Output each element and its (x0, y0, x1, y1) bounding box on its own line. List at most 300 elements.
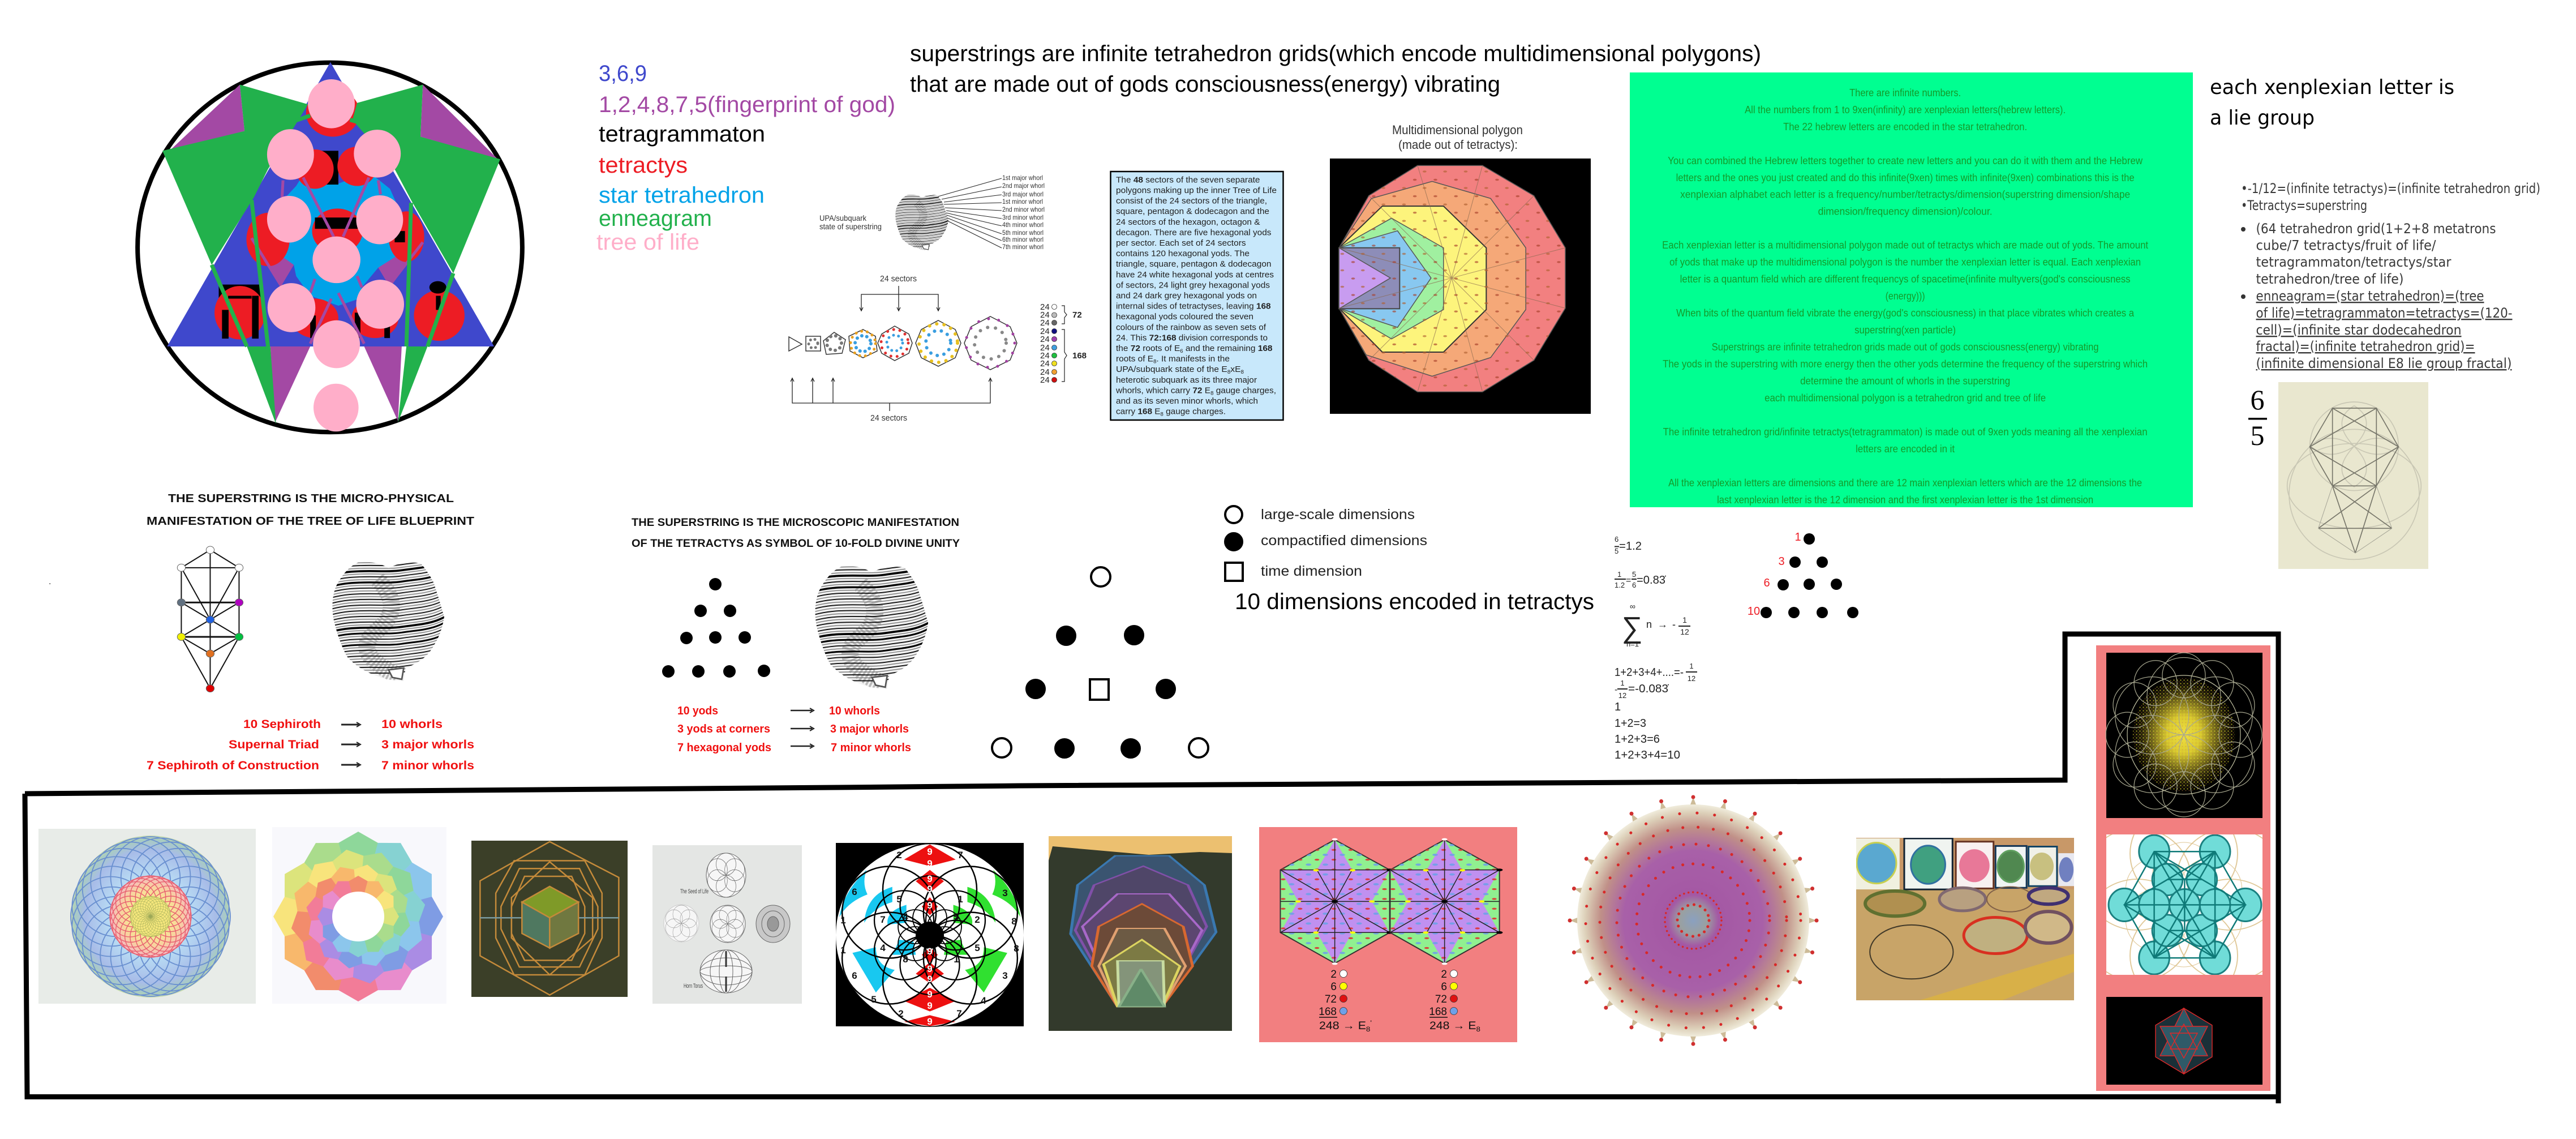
figure: superstring whorl diagram (819, 174, 1045, 251)
whorl labels: 1st major whorl (1002, 174, 1043, 182)
table (1856, 889, 2074, 1000)
label: UPA/subquark: UPA/subquark (819, 213, 867, 222)
bullet 1: tetragrammaton/tetractys/star (2256, 254, 2452, 270)
polygon title (1392, 123, 1523, 152)
box text: and 24 dark grey hexagonal yods on (1116, 292, 1257, 301)
digits: 4 (903, 911, 908, 922)
legend column 1 (1319, 969, 1447, 1018)
title: micro-physical manifestation (147, 493, 474, 528)
tree of life sephiroth (267, 79, 404, 431)
whorl labels: 7th minor whorl (1002, 243, 1044, 251)
salmon background (2096, 645, 2270, 1091)
box text: of sectors, 24 light grey hexagonal yods (1116, 281, 1270, 290)
equation infinite sum: 12 (1680, 627, 1689, 636)
box text: whorls, which carry 72 E (1116, 386, 1210, 395)
panel: blue explanation box (1110, 172, 1283, 420)
sum lines (1319, 1017, 1448, 1018)
top label 24 sectors: 24 sectors (880, 274, 917, 284)
equation 1+2+3+4... (1615, 662, 1697, 683)
heading: each xenplexian letter is a lie group (2210, 76, 2454, 130)
totals 248 (1319, 1019, 1480, 1033)
box text lines: The yods in the superstring with more energy then the other yods determine the frequency of the superstring which (1663, 358, 2148, 370)
image: numbered enneagram mandala (836, 843, 1024, 1027)
box text lines: There are infinite numbers. (1849, 87, 1961, 99)
triangular number sums: 1+2=3 (1615, 717, 1646, 730)
triangular number sums (1615, 701, 1680, 761)
digits: 4 (981, 995, 986, 1006)
legend column 1: 168 (1429, 1006, 1447, 1018)
box text lines: letter is a quantum field which are different frequencys of spacetime(infinite multyvers(god's consciousness (1680, 273, 2131, 285)
seed of life figures (664, 853, 790, 993)
digits: 4 (880, 943, 886, 953)
box text lines: (energy))) (1886, 290, 1925, 302)
tetragrammaton letters with tetractys red circles (214, 89, 465, 341)
polygon row (789, 316, 1017, 370)
equation 1+2+3+4...: 1 (1689, 662, 1694, 670)
headline (910, 41, 1761, 97)
star figure (2156, 1008, 2212, 1074)
image: chalk nested polygons (1049, 836, 1232, 1031)
whorl labels: 2nd major whorl (1002, 182, 1045, 190)
nested chalk polygons (1071, 856, 1216, 1007)
text block: equalities list (2241, 181, 2540, 371)
image: orange polygons on green board (471, 841, 628, 997)
photo contents (1856, 838, 2074, 1000)
equation 1/1.2=5/6=0.83: 5 (1632, 570, 1636, 579)
symbols (1225, 506, 1243, 581)
panel: salmon geometry column (2096, 645, 2270, 1091)
equation 6/5=1.2: 5 (1615, 547, 1618, 555)
box text: decagon. There are five hexagonal yods (1116, 228, 1271, 237)
panel: salmon E8xE8 diagram (1259, 827, 1517, 1042)
equation -1/12=-0.083 (1615, 679, 1669, 700)
box text: have 24 white hexagonal yods at centres (1116, 271, 1274, 280)
legend: fingerprint of god: 1,2,4,8,7,5(fingerprint of god) (599, 92, 895, 117)
box text: The 48 sectors of the seven separate (1116, 175, 1260, 185)
rings of red roots (1586, 813, 1801, 1028)
box text lines: All the xenplexian letters are dimensions and there are 12 main xenplexian letters which are the 12 dimensions the (1668, 477, 2142, 489)
board (471, 841, 628, 997)
box text lines: letters and the ones you just created and do this infinite(9xen) times with infinite(9xen) combinations this is the (1676, 172, 2135, 183)
large-scale dimension corners (992, 567, 1208, 757)
polygon title: Multidimensional polygon (1392, 123, 1523, 137)
bottom bracket arrows (791, 378, 992, 411)
equation 6/5=1.2: 6 (1615, 535, 1618, 543)
purple connecting lines (252, 178, 423, 344)
yod count legend: 24 (1040, 375, 1050, 385)
box text: UPA/subquark state of the E (1116, 365, 1219, 374)
box text: gauge charges. (1164, 408, 1226, 417)
frame around gallery (25, 634, 2279, 1103)
equation 1/1.2=5/6=0.83: = (1626, 576, 1631, 585)
diagram: numbered tetractys (1748, 531, 1858, 618)
hexagon tetractys pair (1280, 838, 1502, 965)
whorl (889, 185, 954, 251)
headline line 2: that are made out of gods consciousness(energy) vibrating (910, 72, 1500, 97)
totals 72 and 168: 168 (1072, 351, 1087, 361)
whorl labels: 4th minor whorl (1002, 221, 1044, 229)
box text lines: determine the amount of whorls in the superstring (1800, 375, 2010, 387)
box text: the 72 roots of E (1116, 344, 1178, 353)
digits: 8 (1014, 943, 1019, 954)
red counts: 3 (1778, 555, 1785, 568)
compactified dimensions (1027, 626, 1175, 757)
figure labels: Horn Torus (684, 983, 703, 990)
image: metatron's cube (2106, 834, 2262, 975)
yod count legend: 24 (1040, 343, 1050, 353)
equation infinite sum: 1 (1682, 615, 1687, 624)
equation -1/12=-0.083: =-0.083̇ (1628, 683, 1669, 695)
sketch paper (2278, 382, 2428, 569)
colour legend text (596, 61, 895, 255)
totals 248: 8 (1476, 1025, 1480, 1033)
totals 248: 248 → E (1319, 1020, 1361, 1032)
image: E8 lie group projection (1554, 781, 1832, 1060)
yod count legend: 24 (1040, 351, 1050, 361)
digits: 6 (852, 970, 857, 981)
box text: 8 (1153, 359, 1156, 365)
digits: 9 (927, 884, 933, 894)
digits: 6 (852, 887, 857, 897)
teal spheres and lines (2109, 835, 2261, 974)
bullet 2 underlined: fractal)=(infinite tetrahedron grid)= (2256, 339, 2475, 354)
box text: roots of E (1116, 355, 1151, 364)
title: micro-physical manifestation: MANIFESTATION OF THE TREE OF LIFE BLUEPRINT (147, 515, 474, 528)
bullet 2 underlined: cell)=(infinite star dodecahedron (2256, 322, 2462, 338)
yod count legend: 24 (1040, 335, 1050, 344)
legend dots (1340, 970, 1458, 1014)
digits: 1 (840, 945, 846, 956)
section: tree of life superstring (147, 493, 474, 772)
title: microscopic manifestation: OF THE TETRACTYS AS SYMBOL OF 10-FOLD DIVINE UNITY (632, 538, 960, 550)
braces (1062, 306, 1067, 382)
black background (1330, 159, 1591, 414)
equation infinite sum: → (1658, 619, 1668, 630)
labels: compactified dimensions (1261, 533, 1427, 549)
purple inner shapes (252, 238, 423, 288)
digits: 1 (840, 915, 846, 926)
box text lines: You can combined the Hebrew letters together to create new letters and you can do it with them and the Hebrew (1668, 155, 2143, 166)
legend column 1: 168 (1319, 1006, 1337, 1018)
triangular number sums: 1+2+3=6 (1615, 733, 1660, 746)
digits (840, 846, 1019, 1027)
box text: square, pentagon & dodecagon and the (1116, 207, 1269, 216)
circle lattice (2106, 653, 2262, 817)
spiral (263, 821, 454, 1012)
box (1110, 172, 1283, 420)
equation -1/12=-0.083: 12 (1618, 691, 1626, 700)
box text lines (1662, 87, 2148, 506)
digits: 7 (956, 1008, 962, 1019)
labels: large-scale dimensions (1261, 507, 1415, 523)
digits: 9 (927, 964, 933, 974)
yod count legend: 24 (1040, 327, 1050, 336)
equation infinite sum: ∞ (1630, 602, 1635, 611)
box text: 6 (1180, 348, 1183, 354)
top bracket arrows (860, 286, 940, 311)
equation infinite sum: n (1646, 619, 1652, 630)
correspondence table: 7 minor whorls (381, 759, 474, 772)
box text lines: The 22 hebrew letters are encoded in the star tetrahedron. (1783, 121, 2027, 132)
image: string art photo (1856, 838, 2074, 1000)
whorl labels: 5th minor whorl (1002, 229, 1044, 237)
diagram: dimensions tetractys (992, 567, 1208, 757)
legend: star tetrahedron: star tetrahedron (599, 183, 765, 208)
labels: time dimension (1261, 563, 1362, 579)
box text lines: All the numbers from 1 to 9xen(infinity) are xenplexian letters(hebrew letters). (1745, 104, 2066, 115)
fraction 6/5: 6 (2250, 384, 2265, 416)
caption: 10 dimensions: 10 dimensions encoded in tetractys (1235, 589, 1594, 614)
equation infinite sum: n=1 (1626, 640, 1639, 648)
table arrows (341, 722, 360, 767)
red counts (1748, 531, 1801, 618)
box text: per sector. Each set of 24 sectors (1116, 239, 1246, 248)
digits: 5 (974, 943, 980, 953)
triangular number sums: 1+2+3+4=10 (1615, 749, 1680, 761)
digits: 9 (927, 900, 933, 911)
correspondence table: Supernal Triad (229, 738, 319, 751)
dense core (1577, 804, 1809, 1037)
yods (1761, 533, 1858, 618)
coloured regions (839, 845, 1020, 1026)
superstring whorl (319, 542, 457, 681)
table arrows (791, 708, 814, 748)
fraction 6/5: 5 (2250, 419, 2265, 451)
box text lines: The infinite tetrahedron grid/infinite tetractys(tetragrammaton) is made out of 9xen yods meaning all the xenplexian (1663, 426, 2148, 438)
whorl labels: 2nd minor whorl (1002, 205, 1045, 213)
figure: seven polygons and 24 sectors (789, 274, 1087, 423)
box text: consist of the 24 sectors of the triangle, (1116, 197, 1267, 206)
box text: 168 (1258, 344, 1272, 353)
digits: 8 (903, 954, 908, 965)
equation infinite sum: - (1672, 619, 1676, 630)
red counts: 10 (1748, 605, 1760, 618)
figure labels (680, 888, 709, 990)
black background (2106, 997, 2262, 1085)
digits: 9 (927, 846, 933, 857)
equality lines (2241, 181, 2540, 213)
superstring whorl (801, 545, 941, 689)
correspondence table (147, 718, 474, 772)
box text: carry 168 E (1116, 408, 1160, 417)
legend: tetractys: tetractys (599, 153, 688, 178)
digits: 7 (880, 914, 886, 925)
label: UPA/subquark (819, 213, 882, 231)
totals 248: ' (1370, 1019, 1372, 1027)
image: star tetrahedron fractal (2106, 997, 2262, 1085)
tetractys of ten yods (662, 578, 770, 678)
digits: 1 (958, 894, 963, 905)
equations (1615, 535, 1697, 761)
digits: 7 (958, 850, 963, 860)
star tetrahedron (259, 172, 423, 306)
box text: and the remaining (1183, 344, 1258, 353)
digits: 2 (974, 914, 980, 925)
bottom label 24 sectors: 24 sectors (870, 413, 907, 423)
equation 1/1.2=5/6=0.83 (1615, 570, 1666, 589)
correspondence table: 3 yods at corners (677, 723, 770, 735)
legend column 1: 72 (1435, 994, 1447, 1005)
equation -1/12=-0.083: - (1615, 685, 1617, 695)
panel: green xenplexian text box (1630, 72, 2193, 507)
yod count legend: 24 (1040, 367, 1050, 377)
digits: 5 (954, 911, 959, 922)
box text lines: superstring(xen particle) (1854, 324, 1956, 336)
salmon background (1259, 827, 1517, 1042)
image: beige sacred geometry sketch (2278, 382, 2428, 569)
correspondence table: 3 major whorls (830, 723, 909, 735)
white background (2106, 834, 2262, 975)
digits: 5 (871, 994, 877, 1005)
title: microscopic manifestation: THE SUPERSTRING IS THE MICROSCOPIC MANIFESTATION (632, 517, 959, 529)
whorl labels: 1st minor whorl (1002, 198, 1043, 205)
headline line 1: superstrings are infinite tetrahedron grids(which encode multidimensional polygons) (910, 41, 1761, 66)
bullet 1 (2241, 221, 2496, 287)
red counts: 1 (1794, 531, 1801, 543)
black background (836, 843, 1024, 1026)
image: rainbow rosette (35, 801, 266, 1032)
tiny dot mark: . (49, 577, 51, 586)
equation 6/5=1.2: =1.2 (1619, 540, 1642, 553)
box text (1115, 175, 1277, 417)
diagram: circle with star tetrahedron, enneagram and tree of life (138, 62, 522, 432)
box text: colours of the rainbow as seven sets of (1116, 323, 1266, 332)
box text: 8 (1241, 369, 1244, 375)
box text: heterotic subquark as its three major (1116, 376, 1257, 385)
yod count legend: 24 (1040, 318, 1050, 328)
labels (1261, 507, 1427, 579)
digits: 9 (927, 858, 933, 869)
bullet 1: cube/7 tetractys/fruit of life/ (2256, 238, 2436, 254)
title: microscopic manifestation (632, 517, 960, 550)
box text: polygons making up the inner Tree of Life (1116, 186, 1277, 195)
image: seed of life and horn torus (652, 845, 802, 1004)
whorl labels: 3rd minor whorl (1002, 213, 1044, 221)
box text: xE (1230, 365, 1241, 374)
legend column 1: 6 (1441, 981, 1447, 993)
box text: and as its seven minor whorls, which (1116, 397, 1258, 406)
triangular number sums: 1 (1615, 701, 1621, 713)
digits: 9 (927, 974, 933, 984)
box text: contains 120 hexagonal yods. The (1116, 250, 1250, 259)
polygon yods (809, 319, 1015, 367)
grey paper (652, 845, 802, 1004)
black circle lines (842, 843, 1017, 1027)
yod colour dots (1051, 305, 1057, 383)
correspondence table: 3 major whorls (381, 738, 474, 751)
box text: gauge charges, (1213, 386, 1276, 395)
heading: each xenplexian letter is a lie group: a lie group (2210, 106, 2315, 130)
rosette lines (35, 801, 266, 1032)
digits: 5 (896, 894, 902, 905)
legend column 1: 72 (1325, 994, 1337, 1005)
bullet 2 underlined: (infinite dimensional E8 lie group fractal) (2256, 356, 2511, 371)
box text lines: xenplexian alphabet each letter is a frequency/number/tetractys/dimension(superstring dimension/shape (1680, 189, 2130, 200)
totals 72 and 168 (1072, 310, 1087, 361)
rosette disc (71, 836, 230, 997)
legend column 1: 2 (1330, 969, 1337, 980)
correspondence table: 10 whorls (381, 718, 443, 731)
digits: 9 (927, 873, 933, 884)
label: UPA/subquark: state of superstring (819, 222, 882, 231)
box text lines: When bits of the quantum field vibrate the energy(god's consciousness) in that place vibrates which creates a (1676, 307, 2135, 319)
digits: 1 (954, 954, 959, 965)
box text lines: dimension/frequency dimension)/colour. (1818, 206, 1993, 217)
box text: triangle, square, pentagon & dodecagon (1116, 260, 1271, 269)
box text: . It manifests in the (1156, 355, 1230, 364)
box text: internal sides of tetractyses, leaving 168 (1116, 302, 1271, 311)
paper (272, 827, 446, 1004)
figure labels: The Seed of Life (680, 888, 709, 895)
equation infinite sum: ∑ (1621, 611, 1643, 644)
digits: 9 (927, 1000, 933, 1011)
digits: 2 (896, 850, 902, 860)
bullet 1: tetrahedron/tree of life) (2256, 271, 2404, 287)
box text lines: letters are encoded in it (1856, 443, 1955, 455)
digits: 2 (898, 1008, 904, 1019)
correspondence table: 10 Sephiroth (243, 718, 321, 731)
black background (2106, 653, 2262, 818)
wood frame top (1049, 836, 1232, 860)
sketch lines (2287, 402, 2421, 559)
legend column 1: 2 (1441, 969, 1447, 980)
centre hole (916, 922, 944, 949)
correspondence table: 10 whorls (829, 705, 880, 717)
legend: tetragrammaton: tetragrammaton (599, 122, 765, 147)
whorl labels: 3rd major whorl (1002, 190, 1044, 198)
box text: 24 sectors of the hexagon, octagon & (1116, 218, 1260, 227)
title: micro-physical manifestation: THE SUPERSTRING IS THE MICRO-PHYSICAL (168, 493, 454, 505)
equation 1/1.2=5/6=0.83: 6 (1632, 581, 1636, 589)
legend column 1: 6 (1330, 981, 1337, 993)
outer spikes (1554, 781, 1832, 1060)
nested polygons (1339, 165, 1566, 392)
equation infinite sum (1621, 602, 1690, 648)
equation 1/1.2=5/6=0.83: 1 (1617, 570, 1621, 579)
figure: multidimensional polygon (1330, 123, 1591, 414)
green enneagram lines (212, 115, 453, 346)
correspondence table: 10 yods (677, 705, 718, 717)
box text: 8 (1161, 412, 1164, 417)
whorl labels (1002, 174, 1045, 251)
equation 1+2+3+4...: 12 (1688, 674, 1695, 683)
yod count legend: 24 (1040, 310, 1050, 320)
legend: dimension types (1225, 506, 1427, 581)
equation 6/5=1.2 (1615, 535, 1642, 555)
bullet 2 underlined (2241, 288, 2513, 371)
legend: enneagram: enneagram (599, 206, 712, 231)
yod count legend: 24 (1040, 302, 1050, 312)
image: rainbow spiral polygons (263, 821, 454, 1012)
polygon title: (made out of tetractys): (1398, 138, 1518, 152)
equation -1/12=-0.083: 1 (1620, 679, 1625, 687)
whorl pointer lines (938, 178, 1002, 248)
digits: 9 (927, 989, 933, 1000)
polygons and cube (480, 842, 619, 995)
digits: 8 (1011, 916, 1017, 927)
time dimension square (1090, 679, 1109, 700)
yellow dots (2133, 678, 2235, 791)
chalkboard (1049, 836, 1232, 1031)
digits: 3 (1002, 888, 1008, 898)
box text lines: Each xenplexian letter is a multidimensional polygon made out of tetractys which are made out of yods. The amount (1662, 239, 2148, 251)
red counts: 6 (1763, 577, 1770, 589)
blue triangle 3,6,9 (167, 62, 494, 346)
box text: hexagonal yods coloured the seven (1116, 312, 1253, 322)
box text lines: Superstrings are infinite tetrahedron grids made out of gods consciousness(energy) vibrating (1712, 341, 2099, 353)
digits: 3 (1002, 970, 1008, 981)
correspondence table (677, 705, 911, 754)
